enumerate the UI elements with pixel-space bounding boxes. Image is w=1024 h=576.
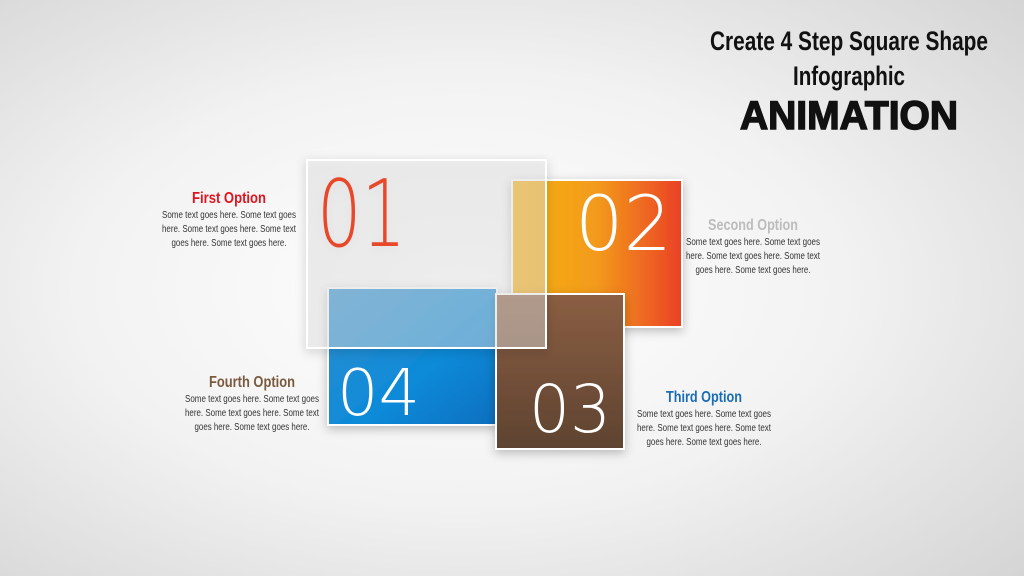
square 02	[512, 179, 682, 327]
text: third option: Third Option	[666, 389, 742, 406]
text: first option: Some text goes here. Some text goes	[162, 209, 296, 221]
square 02: 02	[575, 179, 672, 268]
square 01: 01	[317, 160, 406, 268]
square 03	[496, 294, 624, 449]
text: first option: First Option	[192, 190, 266, 207]
text: third option: goes here. Some text goes here.	[646, 436, 762, 448]
text: second option: here. Some text goes here. Some text	[686, 250, 820, 262]
text: third option: here. Some text goes here. Some text	[637, 422, 771, 434]
text: first option: goes here. Some text goes here.	[172, 237, 286, 249]
text: fourth option: goes here. Some text goes here.	[194, 421, 310, 433]
square 03: 03	[529, 371, 611, 448]
text: first option: here. Some text goes here. Some text	[162, 223, 296, 235]
title	[710, 26, 988, 138]
text: first option	[162, 190, 296, 249]
text: second option: Second Option	[708, 217, 798, 234]
text: second option: Some text goes here. Some text goes	[686, 236, 820, 248]
title: Infographic	[793, 61, 905, 91]
text: fourth option: Some text goes here. Some text goes	[185, 393, 319, 405]
text: third option: Some text goes here. Some text goes	[637, 408, 771, 420]
title: ANIMATION	[740, 94, 958, 138]
text: second option: goes here. Some text goes here.	[696, 264, 810, 276]
text: third option	[637, 389, 771, 448]
square 04	[328, 288, 497, 431]
square 01	[307, 160, 546, 348]
text: fourth option: Fourth Option	[209, 374, 295, 391]
text: second option	[686, 217, 820, 276]
square 04: 04	[337, 357, 420, 431]
text: fourth option	[185, 374, 319, 433]
text: fourth option: here. Some text goes here. Some text	[185, 407, 319, 419]
